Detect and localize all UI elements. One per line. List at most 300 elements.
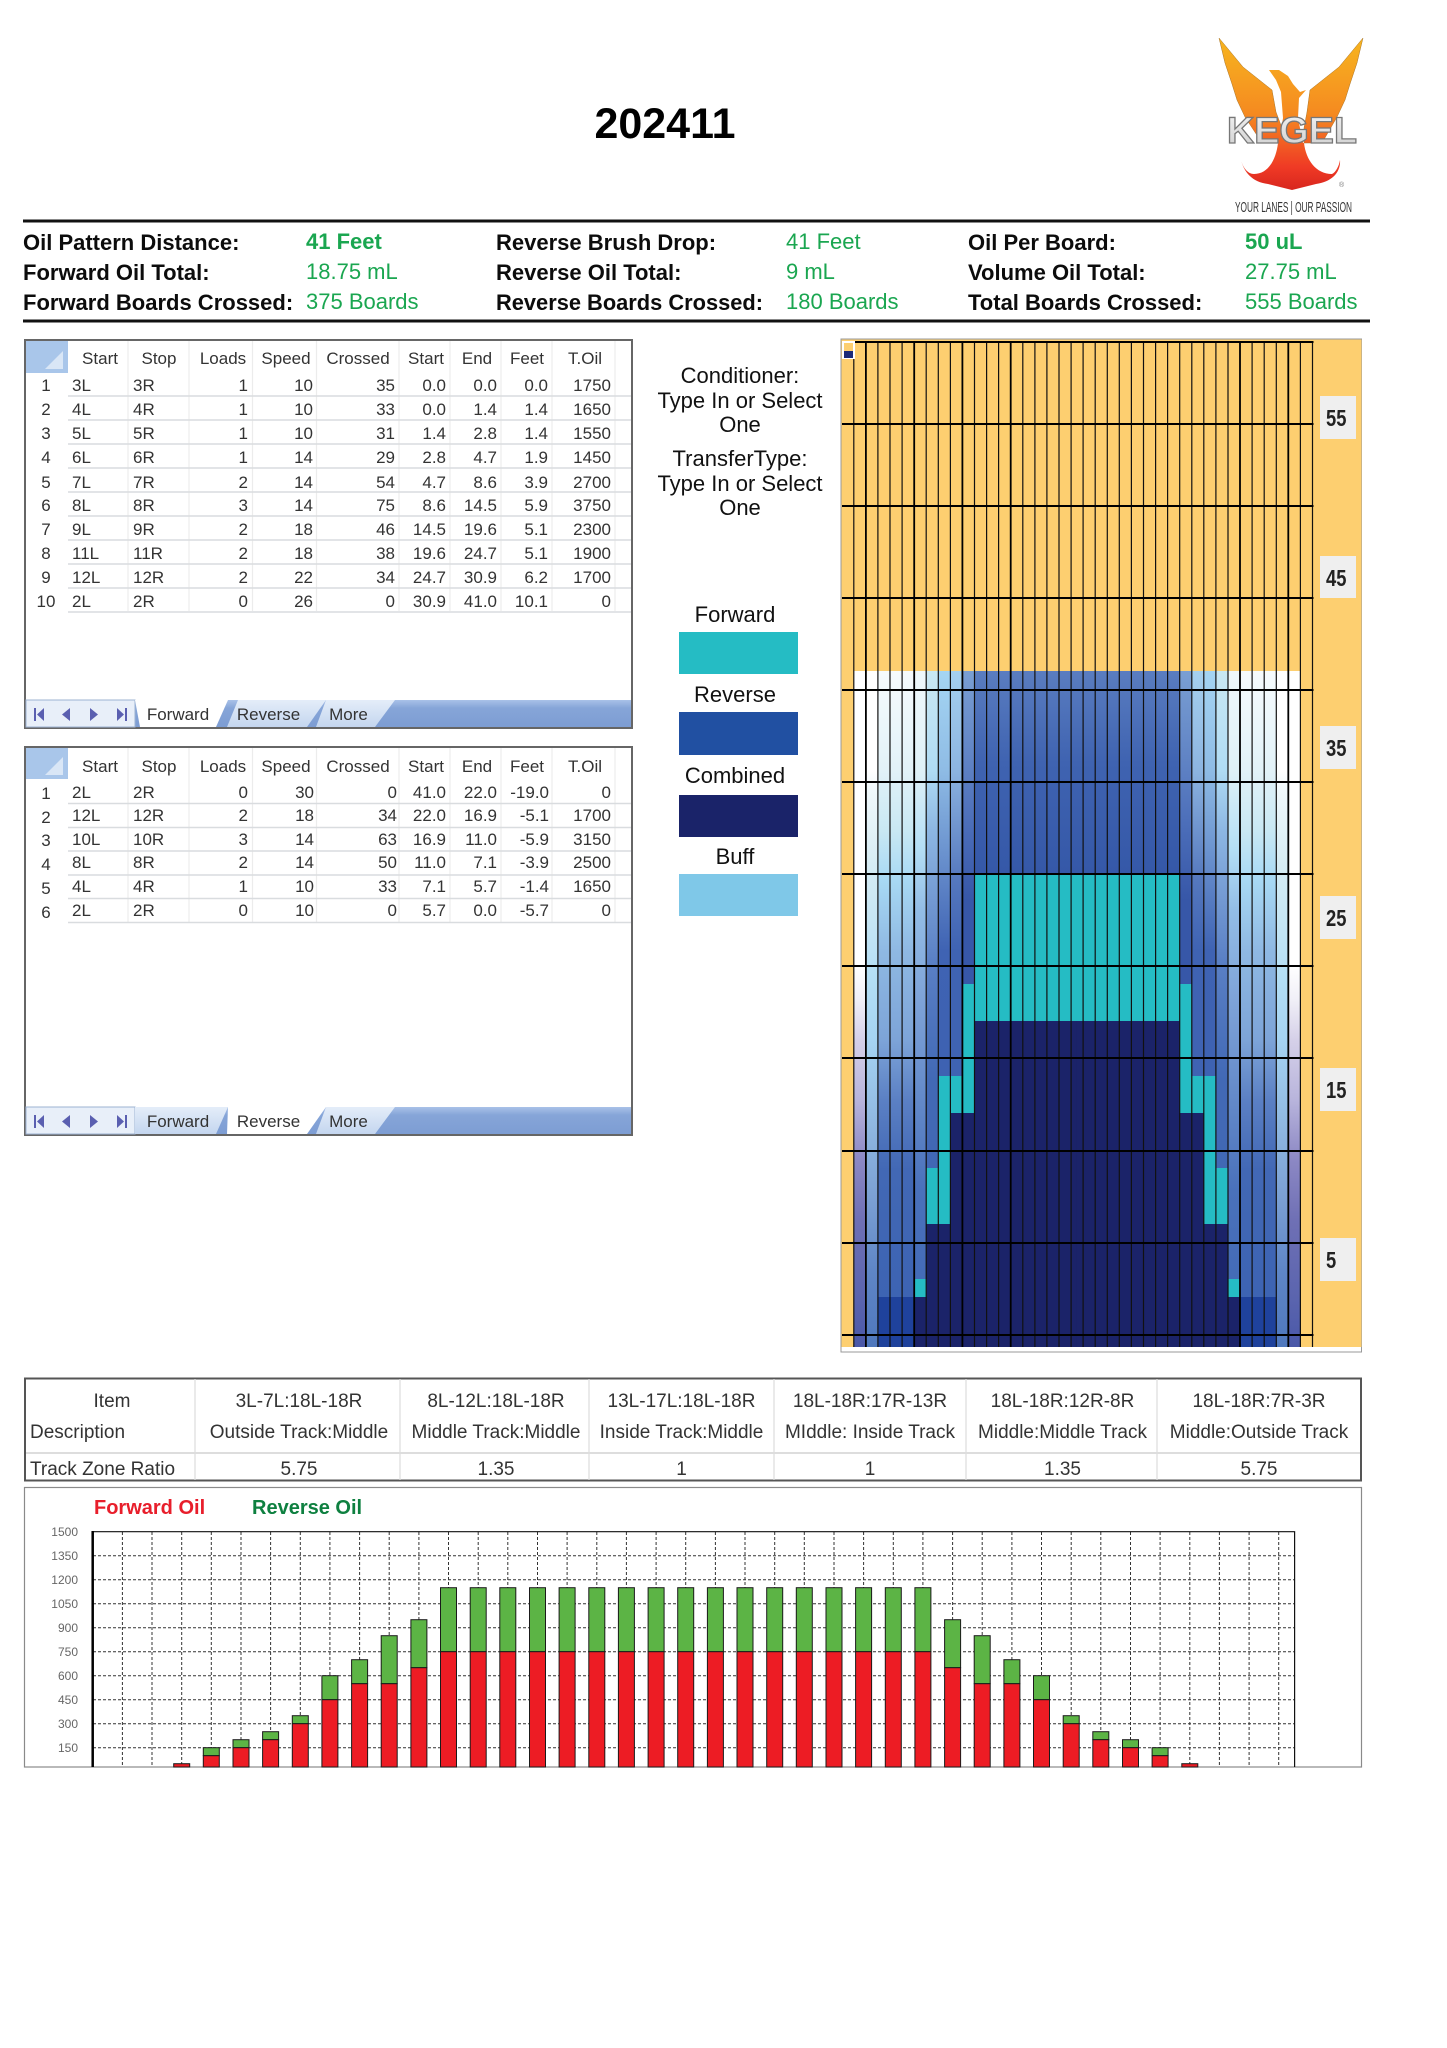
row: track zone ratio xyxy=(30,1459,1277,1480)
row 5 xyxy=(41,473,611,492)
row 7: 18 xyxy=(294,520,313,539)
distance label 15 xyxy=(1320,1068,1356,1111)
row 1: 3L xyxy=(72,376,91,395)
row 1: 3R xyxy=(133,376,155,395)
sheet tabs: forward active xyxy=(26,700,631,727)
row 8: 2 xyxy=(239,544,248,563)
table header: Start xyxy=(82,757,118,776)
row 3: -5.9 xyxy=(520,830,549,849)
row 1: 0.0 xyxy=(473,376,497,395)
row: item: 18L-18R:12R-8R xyxy=(991,1391,1134,1412)
stat: total boards crossed xyxy=(968,289,1358,315)
row: track zone ratio: 1.35 xyxy=(1044,1459,1081,1480)
row 3: 1.4 xyxy=(422,424,446,443)
row 3: 3 xyxy=(41,831,51,850)
row 4: 8L xyxy=(72,853,91,872)
row 2: 1650 xyxy=(573,400,611,419)
distance label 45: 45 xyxy=(1326,566,1346,592)
row 4: 1450 xyxy=(573,448,611,467)
row 3: 10L xyxy=(72,830,100,849)
row 10: 2L xyxy=(72,592,91,611)
stat: volume oil total xyxy=(968,259,1337,285)
row 6: 3 xyxy=(239,496,248,515)
distance label 5 xyxy=(1320,1238,1356,1281)
stat: oil pattern distance xyxy=(23,229,382,255)
row 4: 1 xyxy=(239,448,248,467)
table header: Stop xyxy=(142,757,176,776)
row 6: 2R xyxy=(133,901,155,920)
row 5: 3.9 xyxy=(524,473,548,492)
row 4: 6L xyxy=(72,448,91,467)
row 4: -3.9 xyxy=(520,853,549,872)
row 5: 7.1 xyxy=(422,877,446,896)
row 7 xyxy=(41,520,611,539)
panel: forward table xyxy=(25,340,632,728)
row 2: 33 xyxy=(376,400,395,419)
row 5: 33 xyxy=(378,877,397,896)
legend: buff: Buff xyxy=(716,844,755,869)
row 4: 50 xyxy=(378,853,397,872)
stat: total boards crossed: 555 Boards xyxy=(1245,289,1358,314)
row 8: 5.1 xyxy=(524,544,548,563)
row 9: 34 xyxy=(376,568,395,587)
row 4: 6R xyxy=(133,448,155,467)
row: item: 18L-18R:17R-13R xyxy=(793,1391,947,1412)
row: item: 18L-18R:7R-3R xyxy=(1192,1391,1326,1412)
row 9: 2 xyxy=(239,568,248,587)
row 2: 0.0 xyxy=(422,400,446,419)
y axis labels: 300 xyxy=(58,1717,78,1731)
row 10: 10.1 xyxy=(515,592,548,611)
table header xyxy=(82,349,602,368)
sheet tabs: forward active: Forward xyxy=(147,705,209,724)
stat: oil per board: Oil Per Board: xyxy=(968,230,1116,255)
stat: reverse oil total: Reverse Oil Total: xyxy=(496,260,681,285)
row 6: 14.5 xyxy=(464,496,497,515)
bars: reverse oil xyxy=(203,1588,1168,1756)
row 4: 4 xyxy=(41,855,51,874)
title: 202411 xyxy=(594,100,736,148)
sheet tabs: forward active: Reverse xyxy=(237,705,300,724)
y axis labels: 1500 xyxy=(51,1525,78,1539)
row 10: 10 xyxy=(37,592,55,611)
y axis labels: 150 xyxy=(58,1741,78,1755)
distance label 15: 15 xyxy=(1326,1078,1346,1104)
distance label 5: 5 xyxy=(1326,1248,1336,1274)
row 2: 10 xyxy=(294,400,313,419)
row 1: 41.0 xyxy=(413,783,446,802)
row 4: 4 xyxy=(41,448,51,467)
row 10: 0 xyxy=(602,592,611,611)
row 8: 18 xyxy=(294,544,313,563)
row: track zone ratio: 5.75 xyxy=(281,1459,317,1480)
stats panel xyxy=(23,229,1358,315)
row 6: 8L xyxy=(72,496,91,515)
distance label 55 xyxy=(1320,396,1356,439)
row 10: 2R xyxy=(133,592,155,611)
table header: Speed xyxy=(261,757,311,776)
row 5: 5 xyxy=(41,473,51,492)
row 7: 5.1 xyxy=(524,520,548,539)
text block: conditioner: Conditioner: xyxy=(681,363,799,388)
row 8: 24.7 xyxy=(464,544,497,563)
row 6: 3750 xyxy=(573,496,611,515)
legend xyxy=(679,602,798,916)
stat: reverse brush drop xyxy=(496,229,861,255)
row 10: 26 xyxy=(294,592,313,611)
distance label 45 xyxy=(1320,556,1356,598)
row 4: 14 xyxy=(295,853,314,872)
row 6: 8.6 xyxy=(422,496,446,515)
row: track zone ratio: 1 xyxy=(676,1459,687,1480)
stat: reverse oil total: 9 mL xyxy=(786,259,835,284)
row: description: Middle Track:Middle xyxy=(412,1422,580,1443)
row 6: 8R xyxy=(133,496,155,515)
row 8: 1900 xyxy=(573,544,611,563)
table header: End xyxy=(462,757,492,776)
row 3: 14 xyxy=(295,830,314,849)
row 6: -5.7 xyxy=(520,901,549,920)
row 8: 19.6 xyxy=(413,544,446,563)
table header: Loads xyxy=(200,349,246,368)
table header: Stop xyxy=(142,349,176,368)
table header xyxy=(82,757,602,776)
icon: Kegel logo: ® xyxy=(1339,181,1345,189)
sheet tabs: reverse active: More xyxy=(329,1112,368,1131)
stat: reverse boards crossed xyxy=(496,289,899,315)
row 8 xyxy=(41,544,611,563)
row 9: 12R xyxy=(133,568,164,587)
row 2: 34 xyxy=(378,806,397,825)
row 1: 0 xyxy=(239,783,248,802)
row 3: 16.9 xyxy=(413,830,446,849)
row 8: 11R xyxy=(133,544,163,563)
row: description: MIddle: Inside Track xyxy=(785,1422,956,1443)
stat: reverse brush drop: Reverse Brush Drop: xyxy=(496,230,716,255)
icon: Kegel logo: YOUR LANES | OUR PASSION xyxy=(1235,199,1352,216)
row 7: 2300 xyxy=(573,520,611,539)
row 3: 10R xyxy=(133,830,164,849)
row: track zone ratio: 1 xyxy=(865,1459,875,1480)
row 3: 1550 xyxy=(573,424,611,443)
row 10 xyxy=(37,592,611,611)
panel: reverse table xyxy=(25,747,632,1135)
stat: total boards crossed: Total Boards Crossed: xyxy=(968,290,1202,315)
row 1: -19.0 xyxy=(510,783,549,802)
row 5: 5.7 xyxy=(473,877,497,896)
y axis labels: 1350 xyxy=(51,1549,78,1563)
row 2 xyxy=(41,806,611,827)
row 6: 0 xyxy=(388,901,397,920)
row 5: 54 xyxy=(376,473,395,492)
row 6 xyxy=(41,901,611,922)
row 3: 1 xyxy=(239,424,248,443)
row 1: 10 xyxy=(294,376,313,395)
row 5: -1.4 xyxy=(520,877,549,896)
icon: Kegel logo: KEGEL xyxy=(1227,109,1357,151)
stat: forward oil total xyxy=(23,259,398,285)
row 2: 2 xyxy=(41,808,51,827)
panel: oil chart xyxy=(24,1488,1362,1767)
row 5: 10 xyxy=(295,877,314,896)
row 1: 1 xyxy=(239,376,248,395)
y axis labels: 1200 xyxy=(51,1573,78,1587)
row 6: 75 xyxy=(376,496,395,515)
distance label 25: 25 xyxy=(1326,906,1346,932)
row: description: Description xyxy=(30,1422,125,1443)
y axis labels: 1050 xyxy=(51,1597,78,1611)
row 9: 24.7 xyxy=(413,568,446,587)
sheet tabs: reverse active xyxy=(26,1107,631,1134)
row 3: 31 xyxy=(376,424,395,443)
panel: track zone ratio table xyxy=(25,1378,1361,1480)
row 9: 6.2 xyxy=(524,568,548,587)
row 1: 35 xyxy=(376,376,395,395)
stat: reverse brush drop: 41 Feet xyxy=(786,229,861,254)
chart legend: forward oil: Forward Oil xyxy=(94,1497,205,1519)
legend: forward: Forward xyxy=(695,602,775,627)
row: description: Middle:Middle Track xyxy=(978,1422,1147,1443)
row 4: 2.8 xyxy=(422,448,446,467)
row: item: 13L-17L:18L-18R xyxy=(608,1391,755,1412)
row: description xyxy=(30,1422,1349,1443)
row 3: 3150 xyxy=(573,830,611,849)
row 8: 38 xyxy=(376,544,395,563)
row 4: 8R xyxy=(133,853,155,872)
row 1: 0 xyxy=(602,783,611,802)
stat: reverse oil total xyxy=(496,259,835,285)
row 3: 2.8 xyxy=(473,424,497,443)
row 6: 6 xyxy=(41,496,51,515)
row 4: 11.0 xyxy=(414,853,446,872)
row 2: 1.4 xyxy=(524,400,548,419)
row 2: 4R xyxy=(133,400,155,419)
row 3 xyxy=(41,424,611,443)
row 10: 0 xyxy=(386,592,395,611)
lane marker xyxy=(842,341,855,359)
icon: Kegel logo xyxy=(1219,38,1363,216)
row 2: 1700 xyxy=(573,806,611,825)
row 7: 46 xyxy=(376,520,395,539)
sheet tabs: reverse active: Reverse xyxy=(237,1112,300,1131)
row: track zone ratio: 5.75 xyxy=(1241,1459,1277,1480)
stat: reverse boards crossed: 180 Boards xyxy=(786,289,899,314)
row 8: 11L xyxy=(72,544,99,563)
row 6: 5.7 xyxy=(422,901,446,920)
legend: combined xyxy=(679,763,798,837)
row 4: 14 xyxy=(294,448,313,467)
chart legend: reverse oil: Reverse Oil xyxy=(252,1497,362,1519)
row 10: 30.9 xyxy=(413,592,446,611)
row 2: 22.0 xyxy=(413,806,446,825)
y axis labels: 900 xyxy=(58,1621,78,1635)
row 7: 14.5 xyxy=(413,520,446,539)
row 5: 7L xyxy=(72,473,91,492)
text block: transfer type: Type In or Select xyxy=(657,471,823,496)
row 2: -5.1 xyxy=(520,806,549,825)
row 7: 7 xyxy=(41,520,51,539)
row 2: 18 xyxy=(295,806,314,825)
table header: Start xyxy=(82,349,118,368)
row 1: 1750 xyxy=(573,376,611,395)
row 5: 4.7 xyxy=(422,473,446,492)
row 5: 14 xyxy=(294,473,313,492)
row 3: 5L xyxy=(72,424,91,443)
table header: Feet xyxy=(510,349,544,368)
text block: conditioner: Type In or Select xyxy=(657,388,823,413)
row: item: Item xyxy=(94,1391,130,1412)
row 3: 11.0 xyxy=(465,830,497,849)
stat: reverse boards crossed: Reverse Boards Crossed: xyxy=(496,290,763,315)
sheet tabs: forward active: More xyxy=(329,705,368,724)
y axis labels: 750 xyxy=(58,1645,78,1659)
row 3: 5R xyxy=(133,424,155,443)
row 2: 12R xyxy=(133,806,164,825)
stat: forward boards crossed xyxy=(23,289,419,315)
table header: Loads xyxy=(200,757,246,776)
distance label 55: 55 xyxy=(1326,406,1346,432)
distance label 35 xyxy=(1320,726,1356,769)
row 3: 1.4 xyxy=(524,424,548,443)
table header: Speed xyxy=(261,349,311,368)
stat: forward boards crossed: 375 Boards xyxy=(306,289,419,314)
row: track zone ratio: Track Zone Ratio xyxy=(30,1459,175,1480)
row: item: 8L-12L:18L-18R xyxy=(427,1391,565,1412)
y axis labels xyxy=(51,1525,78,1755)
stat: oil pattern distance: 41 Feet xyxy=(306,229,382,254)
sheet tabs: reverse active: Forward xyxy=(147,1112,209,1131)
row 4: 2 xyxy=(239,853,248,872)
row 6: 0 xyxy=(239,901,248,920)
header rule top xyxy=(23,220,1370,222)
legend: combined: Combined xyxy=(685,763,785,788)
distance label 25 xyxy=(1320,896,1356,939)
table header: End xyxy=(462,349,492,368)
row: item: 3L-7L:18L-18R xyxy=(236,1391,362,1412)
row 2 xyxy=(41,400,611,419)
row 1: 0.0 xyxy=(422,376,446,395)
legend: buff xyxy=(679,844,798,916)
row 8: 8 xyxy=(41,544,51,563)
row 2: 4L xyxy=(72,400,91,419)
stat: volume oil total: 27.75 mL xyxy=(1245,259,1337,284)
row 5: 7R xyxy=(133,473,155,492)
table header: Start xyxy=(408,757,444,776)
stat: oil pattern distance: Oil Pattern Distance: xyxy=(23,230,239,255)
table header: Crossed xyxy=(326,349,390,368)
row: track zone ratio: 1.35 xyxy=(478,1459,514,1480)
row 6 xyxy=(41,496,611,515)
bars: forward oil xyxy=(174,1652,1198,1767)
row 1: 2R xyxy=(133,783,155,802)
row 4: 1.9 xyxy=(524,448,548,467)
row 6: 2L xyxy=(72,901,91,920)
row 7: 19.6 xyxy=(464,520,497,539)
row: description: Outside Track:Middle xyxy=(210,1422,388,1443)
row 3: 3 xyxy=(239,830,248,849)
row 9: 22 xyxy=(294,568,313,587)
row 7: 2 xyxy=(239,520,248,539)
legend: forward xyxy=(679,602,798,674)
row 5: 4R xyxy=(133,877,155,896)
table header: T.Oil xyxy=(568,757,602,776)
table header: Start xyxy=(408,349,444,368)
stat: oil per board: 50 uL xyxy=(1245,229,1302,254)
row 4: 7.1 xyxy=(473,853,497,872)
row 9 xyxy=(41,568,611,587)
row 5: 1 xyxy=(239,877,248,896)
legend: reverse: Reverse xyxy=(694,682,776,707)
row: item xyxy=(94,1391,1326,1412)
row 9: 1700 xyxy=(573,568,611,587)
y axis labels: 450 xyxy=(58,1693,78,1707)
row 10: 0 xyxy=(239,592,248,611)
stat: forward oil total: 18.75 mL xyxy=(306,259,398,284)
row 1: 0 xyxy=(388,783,397,802)
row 3: 10 xyxy=(294,424,313,443)
row 3 xyxy=(41,830,611,850)
row 7: 9L xyxy=(72,520,91,539)
row 2: 16.9 xyxy=(464,806,497,825)
row 6: 5.9 xyxy=(524,496,548,515)
row 1: 22.0 xyxy=(464,783,497,802)
row 1: 30 xyxy=(295,783,314,802)
stat: forward oil total: Forward Oil Total: xyxy=(23,260,210,285)
row 5: 5 xyxy=(41,879,51,898)
row 5: 2 xyxy=(239,473,248,492)
row 6: 10 xyxy=(295,901,314,920)
row 6: 6 xyxy=(41,903,51,922)
row 2: 1.4 xyxy=(473,400,497,419)
row 1 xyxy=(41,376,611,395)
row 10: 41.0 xyxy=(464,592,497,611)
row: description: Inside Track:Middle xyxy=(600,1422,763,1443)
row 1: 1 xyxy=(41,784,51,803)
table header: Crossed xyxy=(326,757,390,776)
row 6: 0.0 xyxy=(473,901,497,920)
row 4: 29 xyxy=(376,448,395,467)
text block: transfer type: One xyxy=(719,495,761,520)
table header: T.Oil xyxy=(568,349,602,368)
row 6: 0 xyxy=(602,901,611,920)
row 3: 63 xyxy=(378,830,397,849)
row 1: 0.0 xyxy=(524,376,548,395)
row 5: 4L xyxy=(72,877,91,896)
row 4 xyxy=(41,853,611,874)
distance label 35: 35 xyxy=(1326,736,1346,762)
row 7: 9R xyxy=(133,520,155,539)
row 9: 12L xyxy=(72,568,100,587)
stat: forward boards crossed: Forward Boards Crossed: xyxy=(23,290,293,315)
row 9: 9 xyxy=(41,568,51,587)
row 3: 3 xyxy=(41,424,51,443)
stat: oil per board xyxy=(968,229,1302,255)
header rule bottom xyxy=(23,320,1370,322)
row 1: 1 xyxy=(41,376,51,395)
text block: transfer type: TransferType: xyxy=(673,446,807,471)
row 1: 2L xyxy=(72,783,91,802)
text block: conditioner: One xyxy=(719,412,761,437)
y axis labels: 600 xyxy=(58,1669,78,1683)
legend: reverse xyxy=(679,682,798,755)
row 5 xyxy=(41,877,611,898)
row 4: 2500 xyxy=(573,853,611,872)
row 4 xyxy=(41,448,611,467)
stat: volume oil total: Volume Oil Total: xyxy=(968,260,1146,285)
row 5: 2700 xyxy=(573,473,611,492)
row 2: 1 xyxy=(239,400,248,419)
row 2: 2 xyxy=(239,806,248,825)
